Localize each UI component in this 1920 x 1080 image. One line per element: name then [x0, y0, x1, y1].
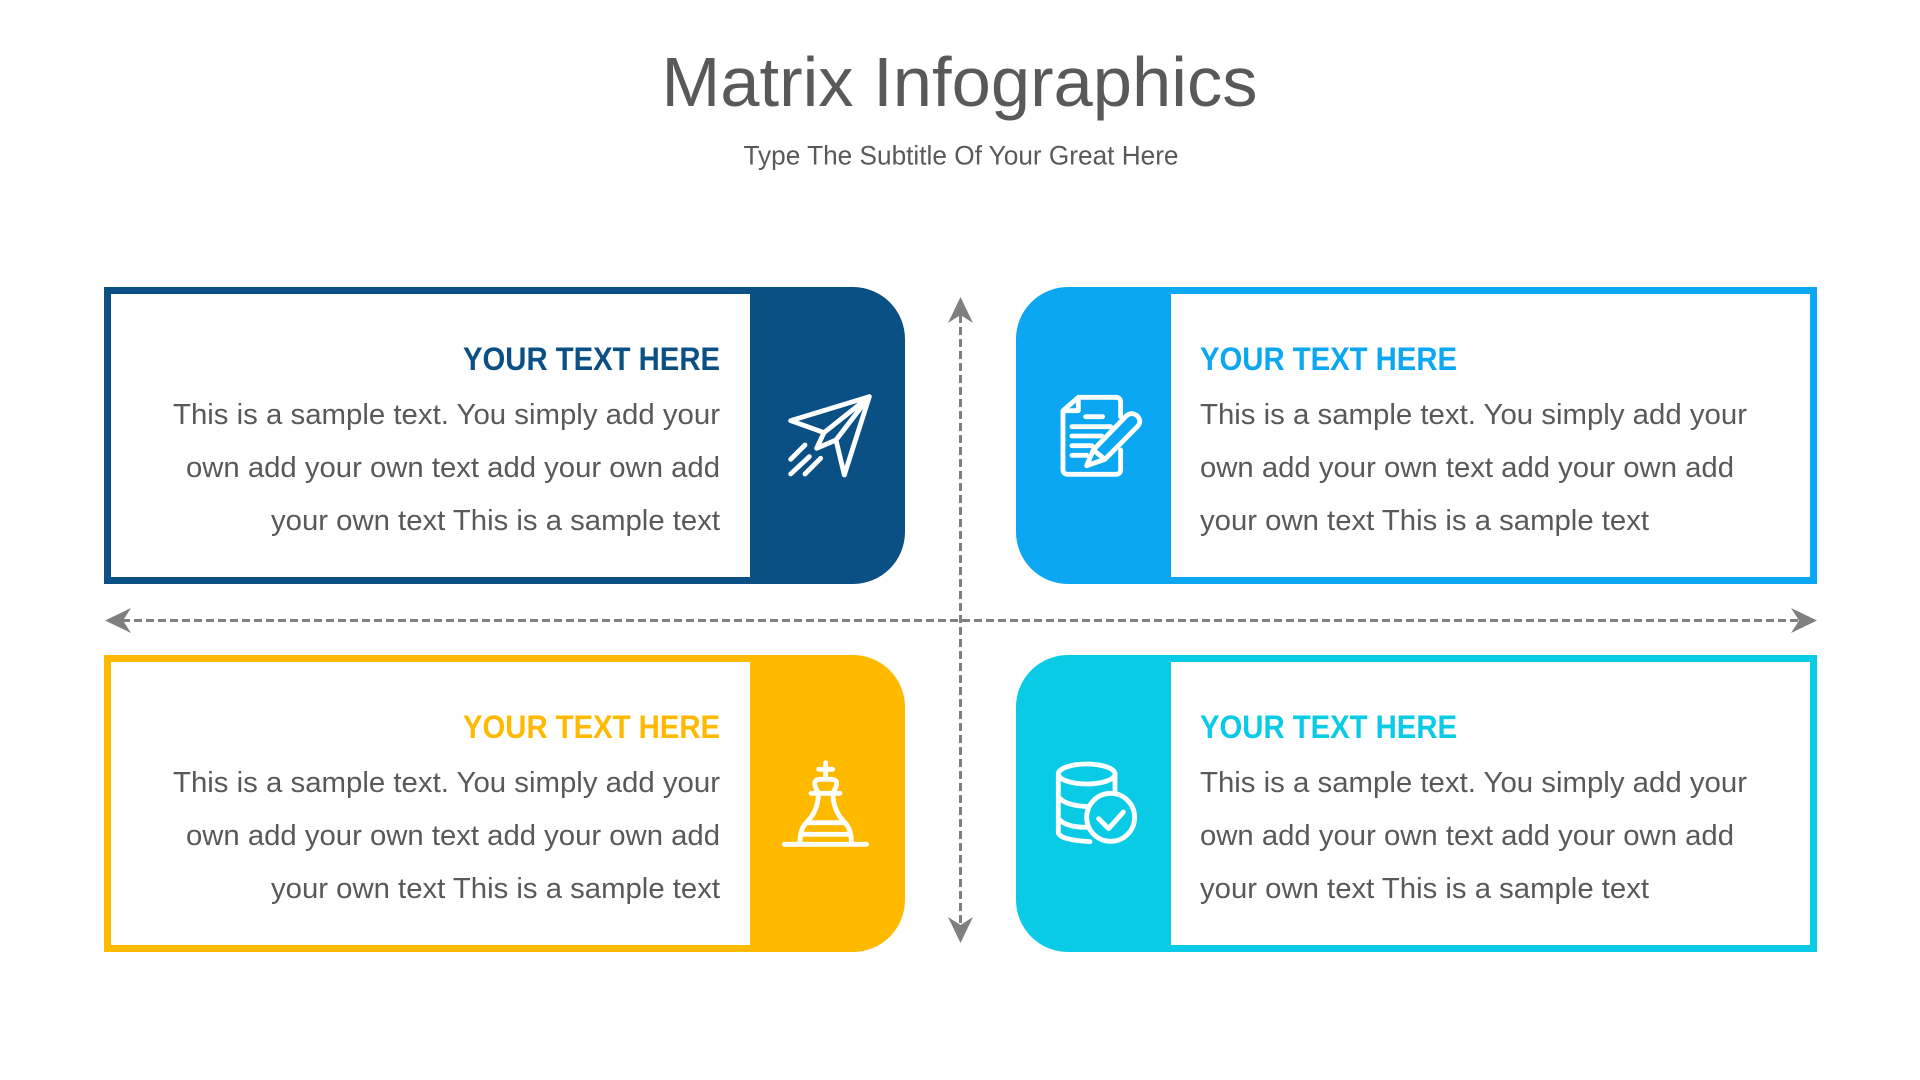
body text: [173, 399, 720, 537]
body text: your own text This is a sample text: [1200, 873, 1649, 905]
arrow: vertical axis: [948, 297, 973, 943]
panel: top left: [104, 287, 905, 584]
body text: This is a sample text. You simply add your: [173, 399, 720, 431]
body text: [1200, 767, 1747, 905]
body text: own add your own text add your own add: [186, 820, 720, 852]
body text: your own text This is a sample text: [271, 505, 720, 537]
body text: own add your own text add your own add: [1200, 452, 1734, 484]
title: Matrix Infographics: [662, 43, 1258, 121]
arrow: horizontal axis: [105, 608, 1817, 633]
body text: your own text This is a sample text: [1200, 505, 1649, 537]
panel frame and colored block: [1016, 655, 1817, 952]
panel: top right: [1016, 287, 1817, 584]
icon: paper plane: [791, 397, 869, 475]
body text: This is a sample text. You simply add your: [1200, 399, 1747, 431]
heading: YOUR TEXT HERE: [463, 709, 720, 745]
heading: YOUR TEXT HERE: [1200, 709, 1457, 745]
body text: This is a sample text. You simply add your: [1200, 767, 1747, 799]
body text: [173, 767, 720, 905]
panel frame and colored block: [104, 655, 905, 952]
panel frame and colored block: [104, 287, 905, 584]
body text: This is a sample text. You simply add your: [173, 767, 720, 799]
icon: chess king: [784, 763, 867, 844]
panel frame and colored block: [1016, 287, 1817, 584]
icon: document and pencil: [1063, 397, 1140, 474]
heading: YOUR TEXT HERE: [1200, 341, 1457, 377]
body text: your own text This is a sample text: [271, 873, 720, 905]
body text: own add your own text add your own add: [186, 452, 720, 484]
panel: bottom left: [104, 655, 905, 952]
body text: [1200, 399, 1747, 537]
body text: own add your own text add your own add: [1200, 820, 1734, 852]
icon: database with check: [1058, 764, 1135, 842]
subtitle: Type The Subtitle Of Your Great Here: [744, 140, 1178, 170]
panel: bottom right: [1016, 655, 1817, 952]
heading: YOUR TEXT HERE: [463, 341, 720, 377]
